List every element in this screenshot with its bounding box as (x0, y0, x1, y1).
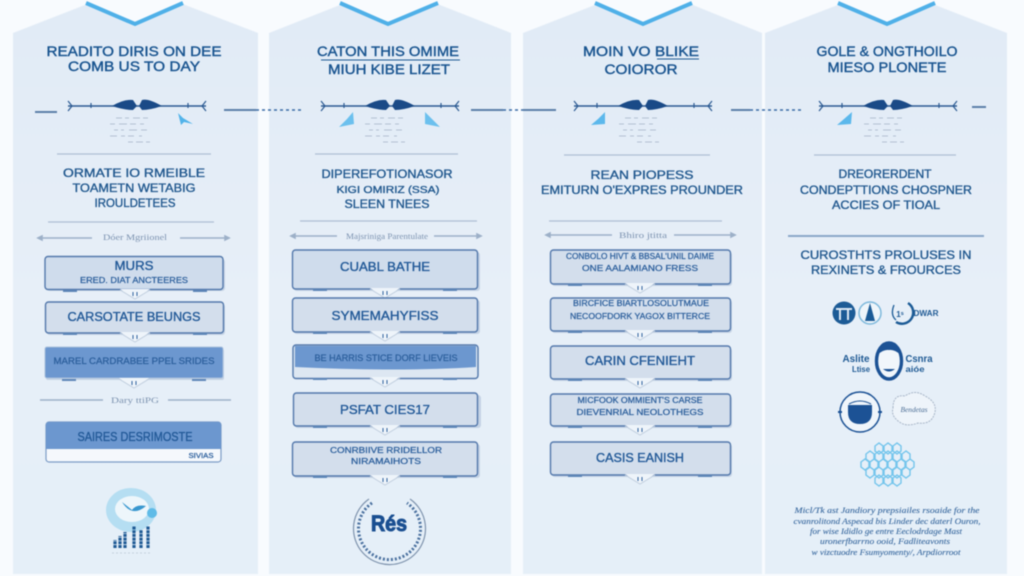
box: Carin Cfenieht: CARIN CFENIEHT (585, 354, 695, 368)
heading two (317, 44, 460, 77)
subheading four: CONDEPTTIONS CHOSPNER (800, 185, 972, 197)
subheading one: TOAMETN WETABIG (72, 183, 196, 195)
box: two line one: ONE AALAMIANO FRESS (582, 263, 698, 273)
box: Symemahyfiss (292, 298, 480, 341)
box: Symemahyfiss: SYMEMAHYFISS (332, 309, 438, 323)
heading one: COMB US TO DAY (68, 59, 200, 74)
icon: face with labels: aióe (906, 365, 925, 374)
panel: column one (13, 3, 258, 574)
box: two line three (550, 394, 732, 435)
section label four (546, 231, 735, 240)
text: Curosthts Proluses: REXINETS & FROURCES (811, 263, 961, 277)
section label one: Dóer Mgriionel (103, 233, 168, 242)
box: two line three: MICFOOK OMMIENT'S CARSE (578, 395, 703, 405)
box: Carin Cfenieht (550, 346, 732, 388)
heading four (816, 44, 958, 75)
section label three (291, 232, 481, 241)
box: Psfat Cies: PSFAT CIES17 (340, 403, 430, 417)
box: half blue (293, 345, 478, 387)
box: Cuabl Bathe: CUABL BATHE (340, 260, 430, 274)
heading four: GOLE & ONGTHOILO (816, 44, 958, 59)
subheading two: KIGI OMIRIZ (SSA) (336, 184, 440, 196)
box: two line label (292, 442, 480, 485)
panel: column four (765, 3, 1007, 574)
box: Saires Desrimoste: SIVIAS (188, 453, 214, 460)
chevron one (86, 3, 183, 24)
box: Carsotate Beungs: CARSOTATE BEUNGS (68, 310, 200, 324)
timeline three (574, 100, 712, 142)
icon: face with labels: Aslite (842, 354, 870, 365)
chevron four (838, 3, 935, 24)
emblem: circular seal: Rés (371, 511, 407, 536)
box: two line two: BIRCFICE BIARTLOSOLUTMAUE (573, 298, 709, 308)
box: two line label: NIRAMAIHOTS (351, 456, 421, 466)
box: Casis Eanish (550, 442, 732, 484)
icon: sketched cloud (892, 392, 935, 425)
subheading one (63, 168, 205, 210)
paragraph: footer note: cvanrolitond Aspecad bis Linder dec daterl Ouron, (794, 516, 980, 526)
text: Curosthts Proluses: CUROSTHTS PROLUSES IN (800, 248, 972, 262)
section label four: Bhiro jtitta (619, 231, 668, 240)
box: two line one (550, 250, 732, 293)
heading two: MIUH KIBE LIZET (328, 62, 450, 77)
paragraph: footer note: for wise Ididlo ge entre Eeclodrdage Mast (810, 526, 963, 536)
timeline one (68, 100, 206, 142)
box: two line three: DIEVENRIAL NEOLOTHEGS (576, 407, 704, 417)
box: Murs: ERED. DIAT ANCTEERES (80, 275, 188, 285)
subheading four: DREORERDENT (838, 169, 932, 181)
heading two: CATON THIS OMIME (317, 44, 459, 59)
box: half blue: BE HARRIS STICE DORF LIEVEIS (314, 353, 458, 363)
timeline two (321, 100, 459, 142)
box: two line two (550, 298, 732, 340)
subheading three: EMITURN O'EXPRES PROUNDER (541, 185, 743, 197)
section label three: Majsriniga Parentulate (346, 232, 428, 241)
connector dashes between columns (35, 107, 986, 112)
text: Curosthts Proluses (800, 248, 972, 277)
icon: water cloud with bars (106, 488, 157, 553)
paragraph: footer note: w vizctuodre Fsumyomenty/, Arpdiorroot (812, 547, 961, 557)
box: Saires Desrimoste (46, 422, 221, 462)
subheading three: REAN PIOPESS (590, 170, 694, 182)
box: Carsotate Beungs (46, 302, 225, 342)
subheading three (541, 170, 743, 197)
timeline four (819, 100, 957, 142)
subheading four (800, 169, 972, 212)
box: Murs (45, 256, 225, 299)
box: two line label: CONRBIIVE RRIDELLOR (330, 445, 442, 455)
icon row: globe, tree, crescent (832, 302, 939, 324)
heading three: COIOROR (604, 62, 678, 77)
heading three: MOIN VO BLIKE (583, 44, 699, 59)
section label one (38, 233, 229, 242)
panel: column two (269, 3, 511, 574)
subheading two: DIPEREFOTIONASOR (322, 169, 452, 181)
box: two line two: NECOOFDORK YAGOX BITTERCE (570, 311, 710, 321)
box: highlighted blue: MAREL CARDRABEE PPEL SRIDES (54, 356, 214, 367)
subheading two (322, 169, 452, 211)
chevron two (340, 3, 438, 24)
paragraph: footer note: Micl/Tk ast Jandiory prepsiailes rsoaide for the (793, 505, 980, 515)
heading one: READITO DIRIS ON DEE (46, 44, 222, 59)
icon row: globe, tree, crescent: DWAR (914, 309, 939, 318)
box: Casis Eanish: CASIS EANISH (596, 451, 684, 465)
subheading four: ACCIES OF TIOAL (832, 200, 941, 212)
box: Psfat Cies (294, 393, 481, 435)
emblem: circular seal (354, 499, 426, 565)
icon: face with labels: Csnra (906, 354, 933, 365)
icon row: globe, tree, crescent: 1ˢ (896, 310, 904, 319)
chevron three (595, 3, 692, 24)
box: highlighted blue (45, 347, 224, 388)
paragraph: footer note (793, 505, 980, 557)
icon: snowflake network (861, 443, 914, 486)
box: Cuabl Bathe (292, 250, 480, 298)
heading four: MIESO PLONETE (828, 60, 946, 75)
subheading one: IROULDETEES (94, 198, 176, 210)
box: two line one: CONBOLO HIVT & BBSAL'UNIL DAIME (566, 251, 714, 261)
section label two: Dary ttiPG (111, 396, 159, 405)
icon: face with labels (842, 343, 933, 379)
subheading two: SLEEN TNEES (344, 199, 430, 211)
panel: column three (523, 3, 762, 574)
icon: sketched cloud: Bendetas (900, 406, 928, 414)
icon: bowl in ring (838, 392, 882, 432)
subheading one: ORMATE IO RMEIBLE (63, 168, 205, 180)
box: Saires Desrimoste: SAIRES DESRIMOSTE (78, 430, 192, 444)
heading three (583, 44, 699, 77)
icon: face with labels: Ltise (852, 365, 871, 374)
paragraph: footer note: uronerfbarrno ooid, Fadliteavonts (820, 536, 951, 546)
box: Murs: MURS (114, 259, 154, 273)
heading one (46, 44, 222, 74)
